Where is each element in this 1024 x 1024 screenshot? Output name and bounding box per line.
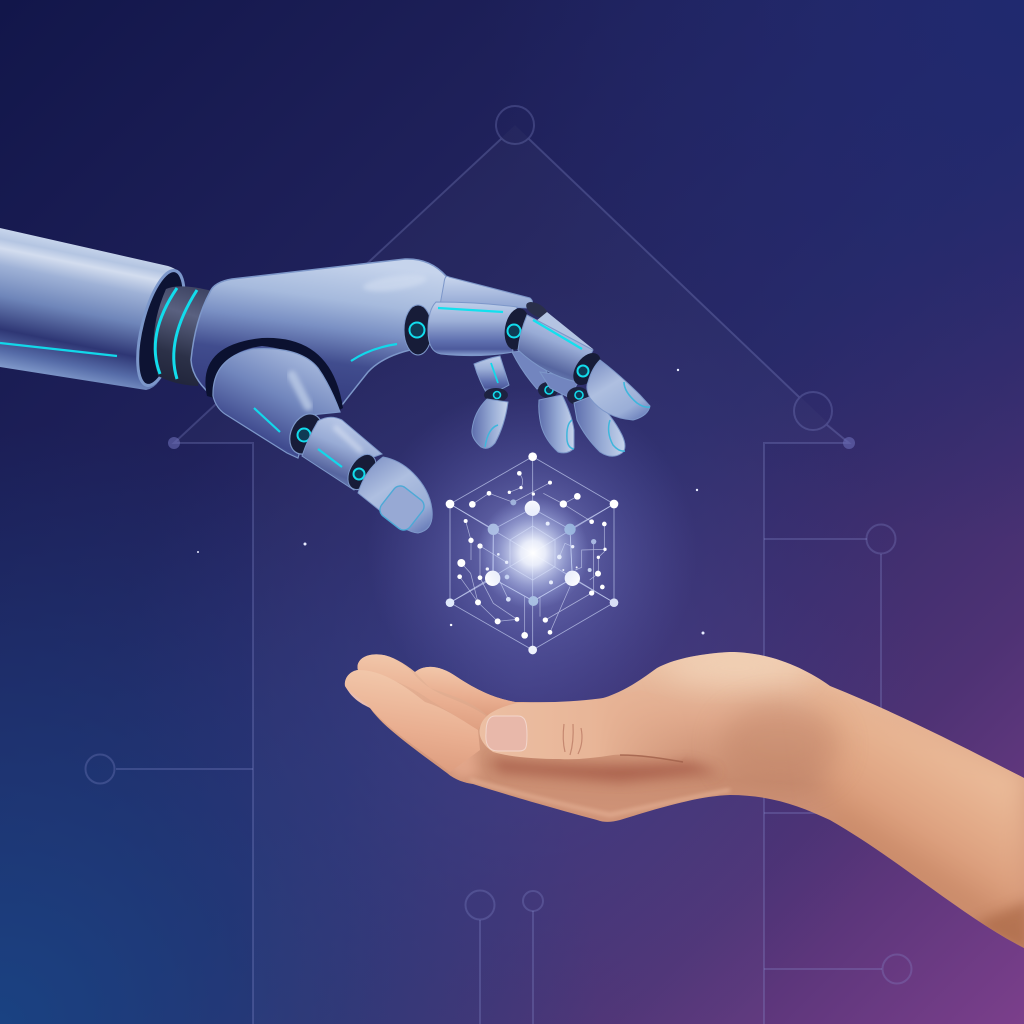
thumb joint 1 <box>284 409 328 459</box>
ring finger <box>415 667 515 716</box>
palm cyan stripe <box>351 344 397 361</box>
bellows connector <box>154 286 212 386</box>
palm highlight <box>362 272 428 294</box>
robot fingers <box>404 276 650 456</box>
forearm cuff opening <box>128 266 194 390</box>
index middle cyan stripe <box>533 320 582 349</box>
back joint <box>524 299 550 321</box>
little fingertip <box>472 399 508 448</box>
thumb cyan stripe <box>254 408 280 432</box>
palm <box>191 259 452 410</box>
back upper segment <box>525 312 593 370</box>
ring nail <box>609 420 625 451</box>
index second joint <box>502 306 532 352</box>
circuit traces <box>460 473 605 635</box>
bellows cyan rings <box>155 288 197 379</box>
central glow <box>367 387 697 717</box>
middle lower segment <box>512 350 552 389</box>
cube wireframe <box>450 457 614 650</box>
ring fingertip <box>574 396 625 456</box>
robot arm <box>0 228 452 533</box>
thumb joint 2 <box>342 450 382 494</box>
middle lower joint <box>538 382 558 398</box>
index nail <box>624 382 650 407</box>
back finger segment <box>440 276 532 308</box>
little finger joint <box>484 388 508 402</box>
thumb phalanx highlight <box>336 428 360 450</box>
thumb crease line <box>620 755 683 762</box>
index fingernail <box>347 689 371 708</box>
circuit house outline <box>86 106 912 1024</box>
thumb base <box>213 349 340 458</box>
thumb fingertip <box>358 457 432 533</box>
ring joint <box>567 387 589 405</box>
hand base <box>345 652 1024 948</box>
human hand <box>345 652 1024 960</box>
forearm <box>0 228 184 390</box>
thumb nail <box>377 483 427 533</box>
forearm cyan stripe <box>0 343 117 356</box>
middle nail <box>567 420 574 449</box>
middle fingertip <box>539 395 574 453</box>
thumb socket <box>205 338 343 412</box>
little finger segment <box>474 356 509 392</box>
thumb phalanx cyan stripe <box>318 449 342 467</box>
network cube <box>446 452 618 654</box>
ring lower segment <box>540 372 580 398</box>
index fingertip <box>587 360 650 420</box>
middle finger <box>358 654 486 730</box>
thumb middle phalanx <box>302 417 382 490</box>
first knuckle joint <box>404 305 432 355</box>
index third joint <box>568 348 606 390</box>
little finger cyan stripe <box>491 363 498 383</box>
index middle segment <box>518 315 593 382</box>
thumb knuckle creases <box>563 724 582 755</box>
thumbnail <box>486 716 527 751</box>
little finger nail <box>485 425 498 447</box>
sparkle dots <box>197 369 704 634</box>
cube nodes <box>446 452 618 654</box>
cube core light <box>477 497 589 609</box>
thumb highlight <box>292 375 308 406</box>
index proximal segment <box>428 302 517 356</box>
thumb <box>480 690 690 762</box>
index proximal cyan stripe <box>438 308 503 312</box>
index finger <box>345 670 480 772</box>
hand shading <box>380 652 1024 960</box>
